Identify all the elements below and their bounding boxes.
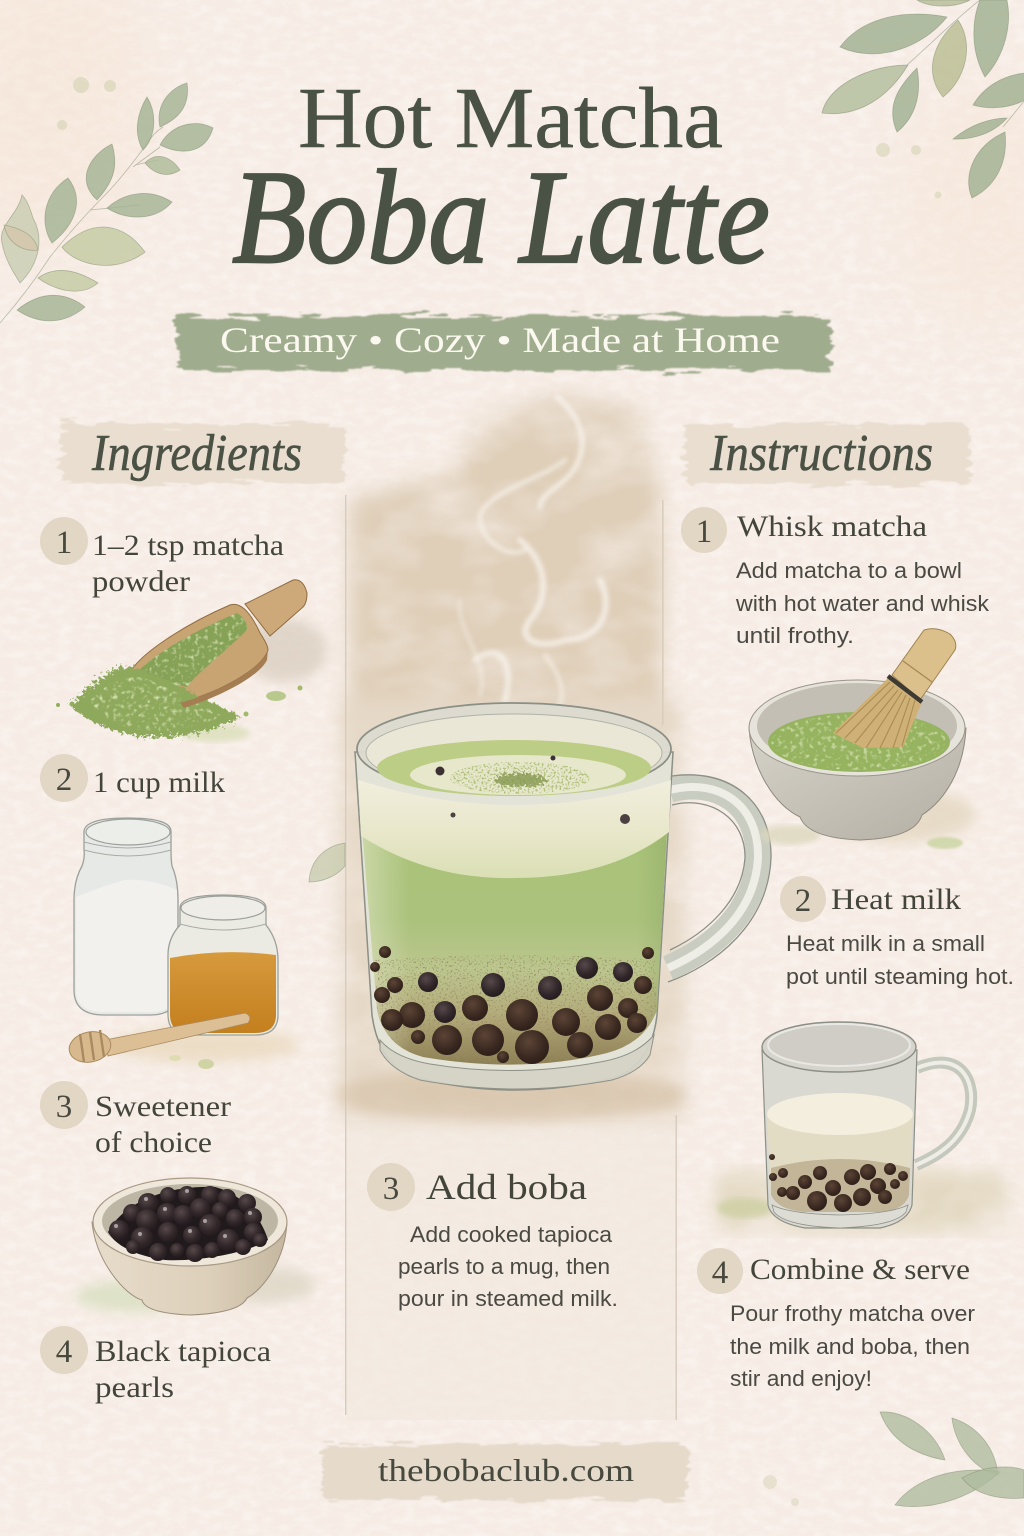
- ingredient 2: 1 cup milk: [93, 766, 225, 799]
- ingredient 1: 1: [56, 525, 72, 561]
- mug rim and opening: [357, 703, 671, 795]
- honey jar: [168, 895, 278, 1035]
- mug handle: [668, 775, 771, 982]
- froth surface with matcha dusting: [377, 740, 651, 796]
- step 2: heat milk: 2: [795, 883, 811, 919]
- title: Hot Matcha: Hot Matcha: [298, 69, 723, 166]
- whisk tines: [833, 678, 922, 748]
- ingredient 4: pearls: [95, 1371, 174, 1404]
- panel: centre column with steam wash: [335, 395, 685, 1420]
- footer: website banner: [322, 1444, 688, 1500]
- ingredient 1: 1–2 tsp matcha: [92, 529, 284, 562]
- powder pile: [70, 666, 240, 737]
- icon: wooden scoop with matcha powder: [56, 580, 327, 742]
- step 3: add boba: 3: [383, 1171, 399, 1207]
- step 3: add boba: pour in steamed milk.: [398, 1286, 618, 1311]
- decoration: top-right leaf branch: [822, 0, 1024, 198]
- step 4: combine and serve: Combine & serve: [750, 1253, 970, 1286]
- step 1: whisk matcha: Add matcha to a bowl: [736, 558, 962, 583]
- scoop handle: [245, 580, 307, 636]
- green liquid: [361, 815, 668, 1065]
- step 4: combine and serve: Pour frothy matcha over: [730, 1301, 975, 1326]
- bowl outside: [749, 728, 966, 840]
- icon: stone bowl with bamboo whisk: [749, 629, 975, 849]
- step 3: add boba: Add cooked tapioca: [410, 1222, 613, 1247]
- step 3: add boba: [367, 1163, 618, 1311]
- milk: [767, 1115, 913, 1212]
- decoration: small leaf beside jars: [309, 843, 345, 882]
- ingredient 3: Sweetener: [95, 1090, 231, 1123]
- heading: Instructions: Instructions: [709, 425, 933, 482]
- icon: milk and honey jars with dipper: [66, 818, 300, 1069]
- step 3: add boba: Add boba: [426, 1167, 587, 1207]
- step 2: heat milk: pot until steaming hot.: [786, 964, 1014, 989]
- step 4: combine and serve: stir and enjoy!: [730, 1366, 872, 1391]
- step 1: whisk matcha: [681, 507, 990, 648]
- ingredient 3: 3: [56, 1089, 72, 1125]
- small mug body: [762, 1050, 917, 1228]
- icon: rising steam: [460, 397, 606, 705]
- small mug rim: [762, 1022, 916, 1072]
- thick base of glass: [380, 1035, 654, 1089]
- step 2: heat milk: Heat milk: [831, 883, 961, 916]
- ingredient 2: 2: [56, 762, 72, 798]
- scoop body: [128, 604, 268, 703]
- subtitle banner: Creamy • Cozy • Made at Home: [220, 320, 780, 360]
- illustration: matcha latte glass mug: [355, 703, 771, 1090]
- honey dipper: [105, 1013, 250, 1056]
- step 4: combine and serve: the milk and boba, then: [730, 1334, 970, 1359]
- icon: small glass mug with milk and boba: [716, 1022, 1006, 1232]
- subtitle banner: [176, 316, 830, 370]
- mug glass body: [355, 752, 673, 1090]
- heading: Ingredients: Ingredients: [91, 425, 302, 482]
- step 1: whisk matcha: Whisk matcha: [737, 510, 927, 543]
- panel: instructions: [681, 424, 1014, 1391]
- ingredient 3: of choice: [95, 1126, 212, 1159]
- matcha in bowl: [768, 712, 950, 772]
- foam band: [358, 780, 671, 878]
- decoration: bottom-right leaf branch: [763, 1412, 1024, 1507]
- step 1: whisk matcha: 1: [696, 514, 712, 550]
- milk jar: [74, 818, 178, 1015]
- ingredient 4: 4: [56, 1334, 72, 1370]
- ingredient 4: Black tapioca: [95, 1335, 271, 1368]
- step 4: combine and serve: [697, 1248, 975, 1391]
- step 2: heat milk: Heat milk in a small: [786, 931, 985, 956]
- bowl inside: [749, 680, 965, 776]
- step 4: combine and serve: 4: [712, 1255, 728, 1291]
- whisk handle: [892, 629, 956, 700]
- ingredient 3: [40, 1081, 231, 1159]
- speckled boba layer: [375, 955, 657, 1065]
- step 2: heat milk: [780, 876, 1014, 989]
- icon: bowl of black tapioca pearls: [75, 1178, 315, 1315]
- title: Boba Latte: Boba Latte: [232, 143, 770, 291]
- ingredient 4: [40, 1326, 271, 1404]
- decoration: top-left leaf branch: [0, 77, 213, 323]
- step 1: whisk matcha: with hot water and whisk: [735, 591, 990, 616]
- ingredient 1: powder: [92, 565, 190, 598]
- ingredient 1: [40, 517, 284, 598]
- step 3: add boba: pearls to a mug, then: [398, 1254, 610, 1279]
- step 1: whisk matcha: until frothy.: [736, 623, 854, 648]
- ingredient 2: [40, 754, 225, 802]
- panel: ingredients: [40, 424, 345, 1404]
- footer: website banner: thebobaclub.com: [378, 1452, 634, 1488]
